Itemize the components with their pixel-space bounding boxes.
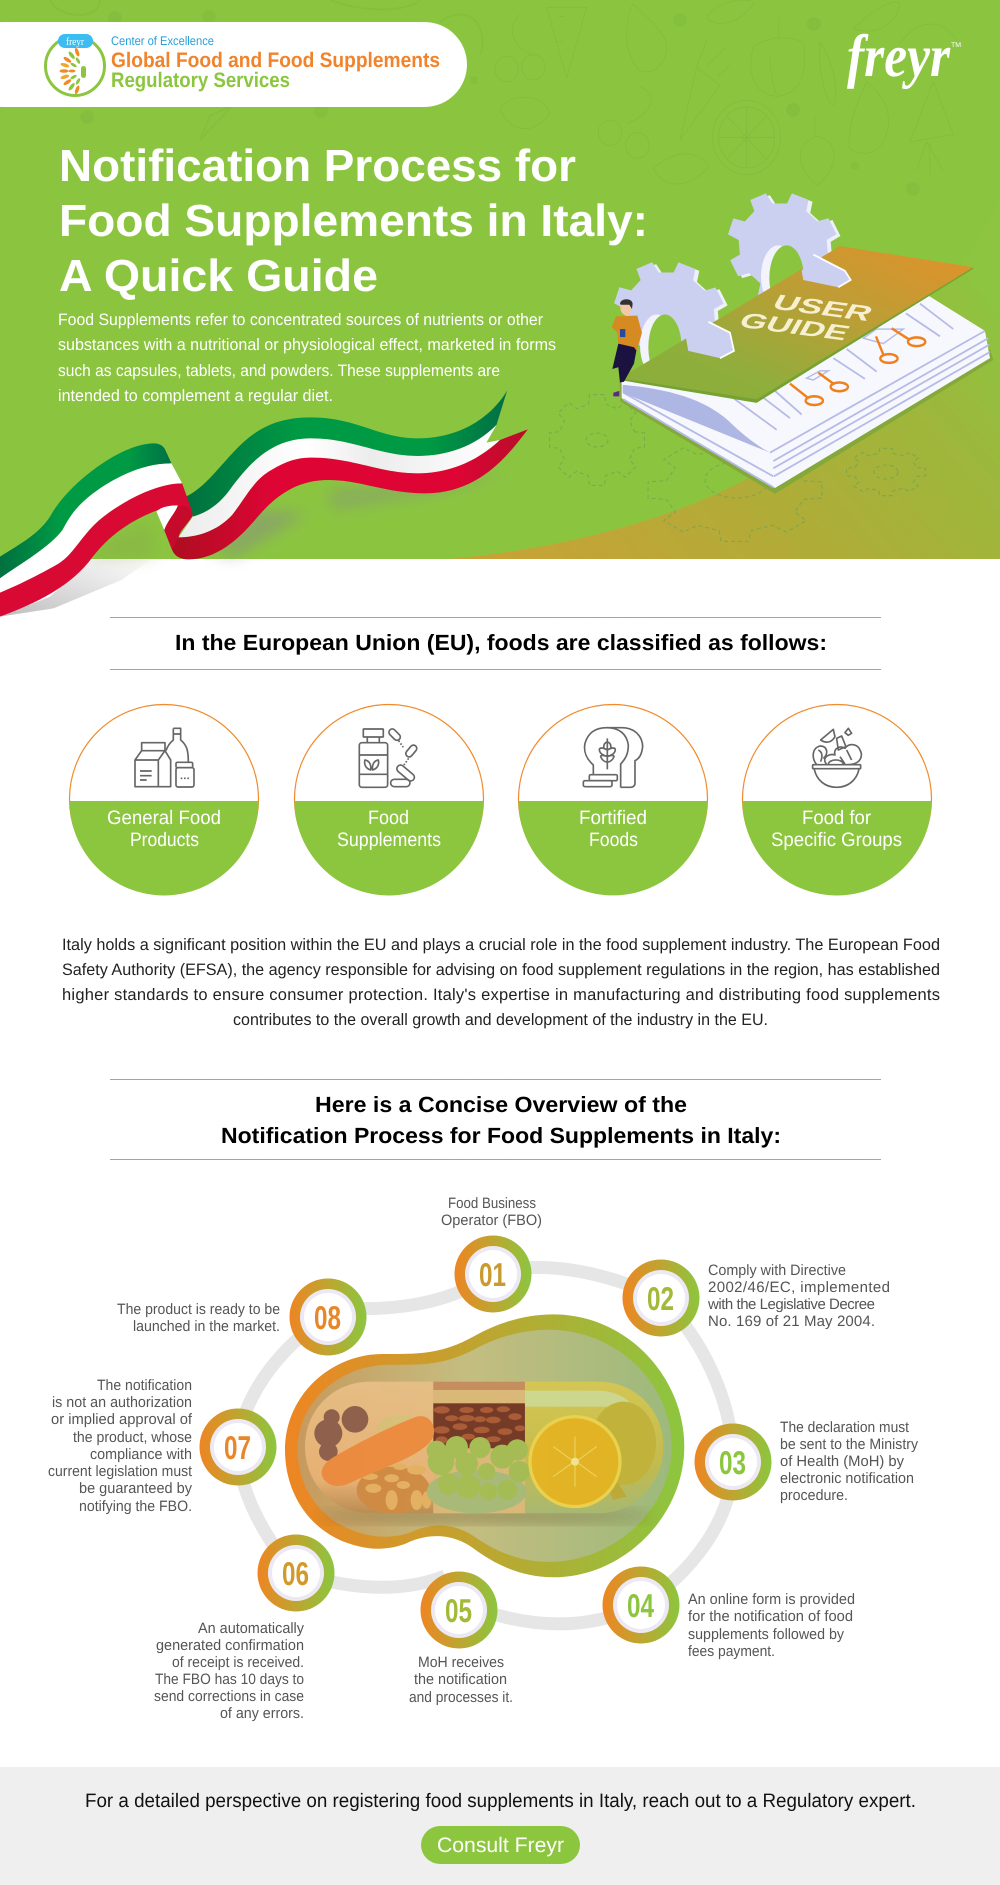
dashed gears <box>550 395 926 541</box>
title: Food Supplements in Italy: <box>59 195 648 246</box>
intro text <box>58 311 556 405</box>
intro text: such as capsules, tablets, and powders. These supplements are <box>58 362 500 380</box>
card: Food for Specific Groups: Specific Groups <box>771 829 902 851</box>
central capsule with food <box>285 1314 684 1577</box>
heading: process overview <box>110 1079 881 1160</box>
step 03: 03 <box>719 1444 746 1481</box>
icon: supplement bottle and pills <box>359 728 418 787</box>
step 06: send corrections in case <box>154 1688 304 1705</box>
footer call to action <box>0 1767 1000 1885</box>
paragraph: Italy in the EU: contributes to the overall growth and development of the industry in the EU. <box>233 1011 768 1029</box>
intro text: Food Supplements refer to concentrated sources of nutrients or other <box>58 311 543 329</box>
book cover <box>619 246 974 403</box>
heading: process overview: Here is a Concise Overview of the <box>315 1092 687 1117</box>
paragraph: Italy in the EU: higher standards to ensure consumer protection. Italy's expertise in manufacturing and distributing food supplements <box>62 986 940 1004</box>
icon: food packages <box>135 728 194 787</box>
step 04: An online form is provided <box>688 1591 855 1608</box>
card: Fortified Foods: Foods <box>589 829 638 851</box>
step 01: Operator (FBO) <box>441 1212 542 1229</box>
button: Consult Freyr: Consult Freyr <box>437 1834 564 1857</box>
step 03 <box>694 1419 918 1504</box>
step 03: procedure. <box>780 1487 848 1504</box>
card: General Food Products: General Food <box>107 807 221 829</box>
icon: small gear <box>600 245 744 390</box>
heading: process overview: Notification Process for Food Supplements in Italy: <box>221 1123 781 1148</box>
card: Food Supplements <box>294 704 484 896</box>
card: General Food Products <box>70 704 258 895</box>
icon: large gear <box>714 176 857 321</box>
step 08: The product is ready to be <box>117 1301 280 1318</box>
card: Food for Specific Groups: Food for <box>802 807 871 829</box>
panel: hero banner <box>0 0 1000 617</box>
book cover: USER <box>768 290 877 326</box>
decorative bottom-right curve <box>450 200 1000 559</box>
icon: salad bowl <box>813 728 861 787</box>
paragraph: Italy in the EU: Safety Authority (EFSA), the agency responsible for advising on food supplement regulations in the region, has established <box>62 961 940 979</box>
step 07: The notification <box>97 1377 192 1394</box>
step 05: the notification <box>414 1671 507 1688</box>
paragraph: Italy in the EU: Italy holds a significant position within the EU and plays a crucial role in the food supplement industry. The European Food <box>62 936 940 954</box>
step 08: launched in the market. <box>133 1318 280 1335</box>
logo pill: center of excellence: freyr <box>66 36 84 48</box>
step 06: 06 <box>282 1555 309 1592</box>
step 02: Comply with Directive <box>708 1262 846 1279</box>
step 04: 04 <box>627 1587 654 1624</box>
step 04: supplements followed by <box>688 1626 844 1643</box>
step 07: compliance with <box>90 1446 192 1463</box>
card: Fortified Foods <box>518 704 708 895</box>
step 03: electronic notification <box>780 1470 914 1487</box>
step 04 <box>602 1566 855 1660</box>
title <box>59 140 648 301</box>
step 02 <box>622 1260 890 1336</box>
illustration: user guide book with gears <box>600 176 993 494</box>
step 04: fees payment. <box>688 1643 775 1660</box>
book cover: GUIDE <box>735 309 854 345</box>
step 07: notifying the FBO. <box>79 1498 192 1515</box>
step 03: The declaration must <box>780 1419 910 1436</box>
footer call to action: For a detailed perspective on registering food supplements in Italy, reach out to a Regulatory expert. <box>85 1790 916 1812</box>
card: Fortified Foods: Fortified <box>579 807 647 829</box>
step 05: 05 <box>445 1592 472 1629</box>
card: Food Supplements: Supplements <box>337 829 441 851</box>
intro text: intended to complement a regular diet. <box>58 387 333 405</box>
step 01: Food Business <box>448 1195 536 1212</box>
step 05: MoH receives <box>418 1654 504 1671</box>
step 03: be sent to the Ministry <box>780 1436 918 1453</box>
logo pill: center of excellence: Global Food and Food Supplements <box>111 49 440 72</box>
title: Notification Process for <box>59 140 576 191</box>
step 02: with the Legislative Decree <box>707 1296 875 1313</box>
freyr logo: freyr <box>847 23 951 89</box>
icon: bread and wheat <box>583 728 643 787</box>
step 03: of Health (MoH) by <box>780 1453 904 1470</box>
process track <box>238 1268 733 1624</box>
step 02: 2002/46/EC, implemented <box>708 1279 890 1296</box>
card: Food for Specific Groups <box>742 704 932 896</box>
step 07: be guaranteed by <box>79 1480 192 1497</box>
step 06: of receipt is received. <box>172 1654 304 1671</box>
step 06: of any errors. <box>220 1705 304 1722</box>
italian flag ribbon <box>0 391 528 617</box>
step 04: for the notification of food <box>688 1608 853 1625</box>
card: General Food Products: Products <box>130 829 199 851</box>
step 06: The FBO has 10 days to <box>155 1671 304 1688</box>
step 07: 07 <box>224 1429 251 1466</box>
logo pill: center of excellence <box>0 22 467 107</box>
icon: man standing <box>612 299 642 396</box>
step 07: the product, whose <box>73 1429 192 1446</box>
step 08 <box>117 1278 366 1356</box>
title: A Quick Guide <box>59 250 378 301</box>
step 06: generated confirmation <box>156 1637 304 1654</box>
freyr logo: TM <box>951 42 961 49</box>
intro text: substances with a nutritional or physiological effect, marketed in forms <box>58 336 556 354</box>
paragraph: Italy in the EU <box>62 936 940 1029</box>
step 07: current legislation must <box>48 1463 193 1480</box>
step 05 <box>409 1572 513 1706</box>
heading: EU classification: In the European Union (EU), foods are classified as follows: <box>175 630 827 655</box>
step 07 <box>48 1377 276 1515</box>
button: Consult Freyr <box>421 1826 580 1864</box>
step 05: and processes it. <box>409 1689 513 1706</box>
logo pill: center of excellence: Regulatory Services <box>111 69 290 92</box>
step 02: No. 169 of 21 May 2004. <box>708 1313 875 1330</box>
step 02: 02 <box>647 1280 674 1317</box>
card: Food Supplements: Food <box>368 807 409 829</box>
step 06 <box>154 1534 334 1722</box>
step 01 <box>441 1195 542 1312</box>
step 07: is not an authorization <box>52 1394 192 1411</box>
step 06: An automatically <box>198 1620 304 1637</box>
step 01: 01 <box>479 1256 506 1293</box>
logo pill: center of excellence: Center of Excellence <box>111 34 214 48</box>
step 08: 08 <box>314 1299 341 1336</box>
step 07: or implied approval of <box>51 1411 193 1428</box>
